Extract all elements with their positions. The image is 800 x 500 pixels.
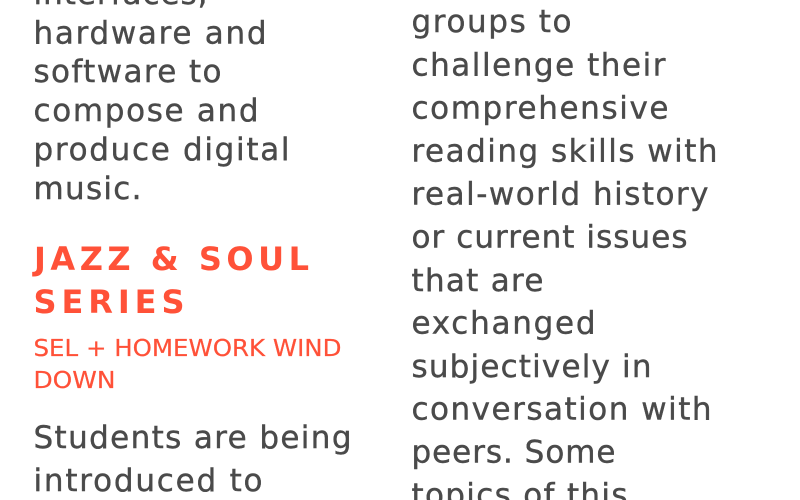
text block: digital music description: compose and	[34, 93, 258, 129]
heading: Jazz & Soul Series: SERIES	[34, 283, 184, 321]
text block: reading groups description: peers. Some	[412, 434, 616, 470]
text block: digital music description: produce digital	[34, 132, 290, 168]
text block: reading groups description: real-world history	[412, 176, 708, 212]
text block: digital music description: software to	[34, 54, 222, 90]
text block: digital music description: hardware and	[34, 16, 266, 52]
subheading: SEL + Homework Wind Down: SEL + HOMEWORK WIND	[34, 334, 342, 362]
text block: digital music description: music.	[34, 171, 142, 207]
text block: reading groups description: conversation with	[412, 392, 712, 428]
heading: Jazz & Soul Series	[32, 240, 309, 321]
text block: Jazz & Soul description: Students are being	[34, 420, 352, 456]
text block: reading groups description: groups to	[412, 4, 572, 40]
text block: reading groups description: that are	[412, 263, 544, 299]
subheading: SEL + Homework Wind Down: DOWN	[34, 366, 116, 394]
text block: reading groups description: subjectively in	[412, 349, 652, 385]
text block: reading groups description: reading skills with	[412, 134, 718, 170]
text block: reading groups description: or current issues	[412, 220, 688, 256]
heading: Jazz & Soul Series: JAZZ & SOUL	[32, 240, 309, 278]
text block: digital music description	[34, 0, 290, 207]
text block: reading groups description: challenge their	[412, 48, 666, 84]
text block: reading groups description: comprehensive	[412, 90, 668, 126]
subheading: SEL + Homework Wind Down	[34, 334, 342, 394]
text block: Jazz & Soul description	[34, 420, 352, 499]
text block: reading groups description: exchanged	[412, 306, 596, 342]
text block: Jazz & Soul description: introduced to	[34, 463, 262, 499]
text block: reading groups description	[412, 4, 718, 500]
